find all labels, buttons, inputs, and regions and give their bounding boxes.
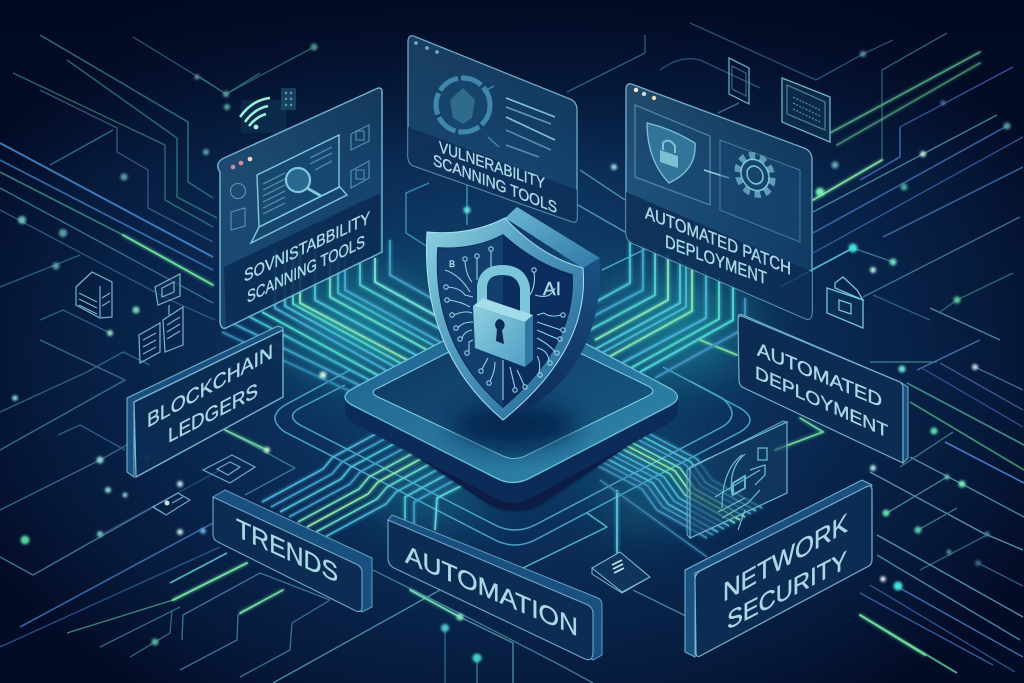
padlock <box>473 270 533 367</box>
B glyph: B <box>449 259 455 269</box>
panel: network icon cube <box>687 421 787 538</box>
title text: VULNERABILITY <box>439 138 545 193</box>
panel: right automated patch deployment <box>626 84 812 319</box>
text band <box>408 127 577 222</box>
icon: small chip <box>592 552 650 593</box>
text band <box>626 192 812 319</box>
label text: DEPLOYMENT <box>755 363 888 443</box>
window dots <box>634 88 656 100</box>
connector <box>704 170 729 178</box>
icon: small tile left <box>153 493 190 515</box>
gear pane <box>720 140 800 242</box>
circuit bundle: lower left <box>262 430 473 537</box>
shield top bevel <box>505 207 600 268</box>
label text: TRENDS <box>236 512 338 589</box>
icon: servers left <box>76 272 183 363</box>
inner face <box>438 235 572 407</box>
shield face <box>426 218 584 420</box>
panel: trends <box>213 490 372 612</box>
icon: wifi chip <box>240 88 296 133</box>
label text <box>755 339 888 443</box>
radar icon <box>436 78 499 147</box>
platform <box>345 309 678 511</box>
panel: automation <box>388 515 602 660</box>
label text: NETWORK <box>723 507 848 608</box>
title text: DEPLOYMENT <box>665 231 767 289</box>
shield <box>426 207 600 420</box>
label text: LEDGERS <box>168 378 258 448</box>
circuit bundle: upper right <box>590 240 745 378</box>
top vignette <box>0 0 1024 170</box>
panel: network security <box>685 480 872 657</box>
icon: small folder tile <box>203 455 255 483</box>
panel: center vulnerability scanning tools <box>408 36 577 222</box>
AI label: AI <box>543 279 561 299</box>
shield pane <box>635 105 710 205</box>
side icons <box>230 125 369 230</box>
circuit pattern <box>444 247 565 400</box>
circuit bundle: lower right <box>587 430 762 557</box>
icon: lock box <box>827 277 863 328</box>
circuit bundle: upper left <box>222 240 440 395</box>
title text: SOVNISTABBILITY <box>244 208 370 286</box>
icon: monitor <box>782 78 830 142</box>
title text: SCANNING TOOLS <box>433 151 557 217</box>
panel: left scanning tools <box>218 88 382 328</box>
window dots <box>414 41 439 54</box>
label text: BLOCKCHAIN <box>147 340 273 433</box>
label text: AUTOMATION <box>405 539 578 642</box>
title text: AUTOMATED PATCH <box>645 202 791 279</box>
central glow <box>285 280 745 514</box>
label text: SECURITY <box>727 545 847 636</box>
globe lock icon <box>715 448 767 530</box>
window dots <box>231 157 252 169</box>
panel: blockchain ledgers <box>127 326 283 477</box>
list lines <box>506 98 555 157</box>
text band <box>224 193 380 327</box>
ground rings around platform <box>275 367 750 545</box>
icon: laptop with magnifier <box>251 135 347 243</box>
icon: phone <box>718 58 749 113</box>
label text: AUTOMATED <box>757 339 882 412</box>
circuit traces: bright green accents <box>123 52 980 655</box>
panel: automated deployment <box>738 314 908 463</box>
title text: SCANNING TOOLS <box>247 231 365 307</box>
keyhole <box>495 319 505 344</box>
shield side <box>503 207 600 420</box>
